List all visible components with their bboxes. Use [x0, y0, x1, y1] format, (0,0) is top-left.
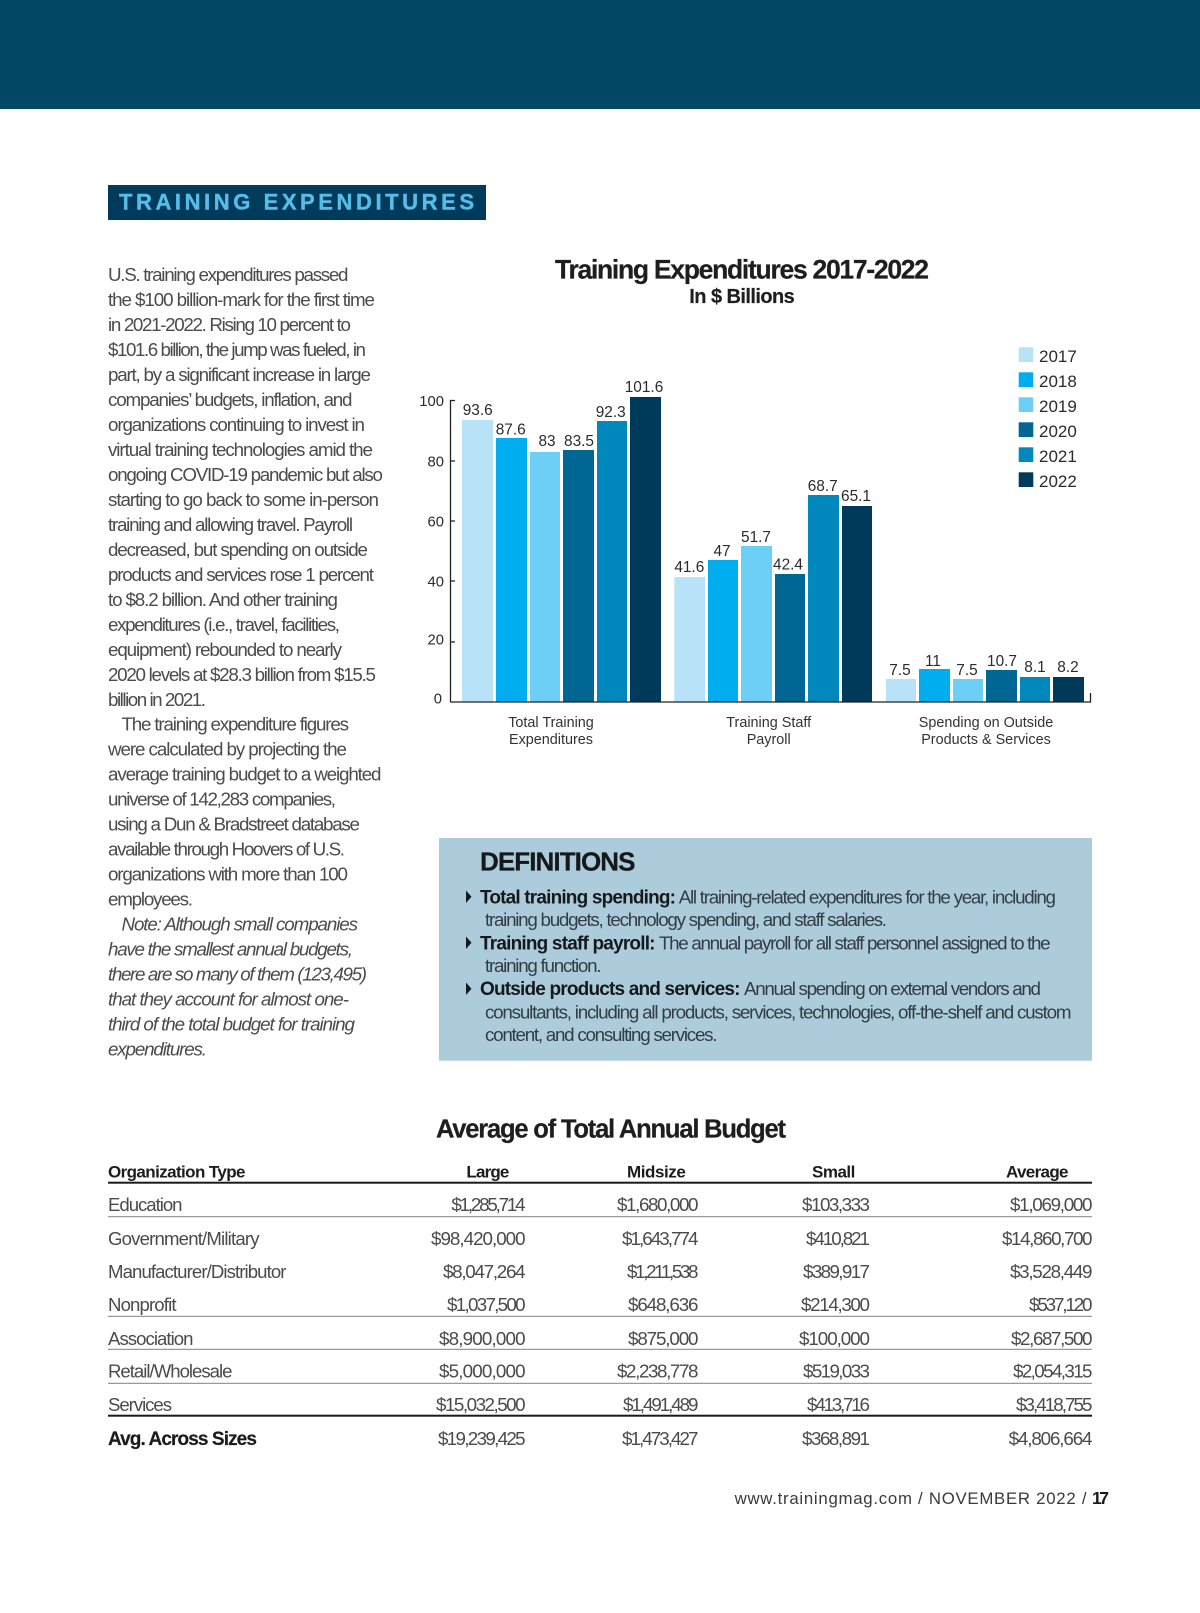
- body text column: third of the total budget for training: [108, 1014, 356, 1034]
- bar chart: training expenditures 2017-2022: [419, 379, 1090, 748]
- row: retail/wholesale: [108, 1361, 1092, 1384]
- body text column: 2020 levels at $28.3 billion from $15.5: [108, 664, 376, 685]
- category labels: Total Training: [508, 715, 594, 731]
- bars: training staff payroll: 41.6: [674, 559, 704, 576]
- body text column: average training budget to a weighted: [108, 764, 382, 784]
- chart legend: 2018: [1039, 372, 1077, 391]
- chart legend: 2022: [1039, 472, 1077, 491]
- row: manufacturer/distributor: $8,047,264: [443, 1261, 526, 1282]
- row: retail/wholesale: $2,054,315: [1013, 1361, 1092, 1382]
- bars: total training expenditures: 83: [538, 433, 556, 450]
- body text column: part, by a significant increase in large: [108, 364, 371, 385]
- row: manufacturer/distributor: $3,528,449: [1010, 1261, 1092, 1282]
- bars: training staff payroll: 47: [713, 543, 731, 560]
- body text column: expenditures (i.e., travel, facilities,: [108, 614, 340, 635]
- bars: spending on outside products and services: 7.5: [956, 662, 978, 679]
- row: association: $2,687,500: [1011, 1328, 1092, 1349]
- row: education: Education: [108, 1194, 182, 1215]
- table: average of total annual budget: [108, 1163, 1092, 1450]
- body text column: companies’ budgets, inflation, and: [108, 389, 352, 410]
- row: services: $413,716: [807, 1394, 870, 1415]
- definition: outside products and services: consultants, including all products, services, technologies, off-the-shelf and custom: [485, 1001, 1072, 1022]
- row: retail/wholesale: $519,033: [803, 1361, 870, 1382]
- x axis line: [450, 693, 1090, 702]
- row: average across sizes: $4,806,664: [1009, 1428, 1092, 1449]
- table header row: Midsize: [627, 1163, 686, 1182]
- definition: total training spending: Total training spending:: [480, 887, 676, 908]
- bars: spending on outside products and services: 7.5: [889, 662, 911, 679]
- body text column: organizations continuing to invest in: [108, 414, 365, 435]
- category labels: Expenditures: [509, 732, 593, 748]
- chart legend: [1019, 347, 1077, 491]
- header band: [0, 0, 1200, 109]
- row: education: $103,333: [802, 1194, 870, 1215]
- row: services: $15,032,500: [436, 1394, 526, 1415]
- row: services: $1,491,489: [623, 1394, 698, 1415]
- row: government/military: $14,860,700: [1002, 1228, 1092, 1249]
- bars: spending on outside products and services: 8.2: [1057, 659, 1079, 676]
- table header row: Average: [1006, 1163, 1068, 1182]
- row: manufacturer/distributor: [108, 1261, 1092, 1282]
- body text column: expenditures.: [108, 1038, 207, 1060]
- category labels: Spending on Outside: [919, 715, 1053, 731]
- row: nonprofit: $537,120: [1029, 1294, 1092, 1315]
- definition: outside products and services: Annual spending on external vendors and: [744, 978, 1041, 999]
- row: nonprofit: $214,300: [801, 1294, 870, 1315]
- row: government/military: $410,821: [806, 1228, 870, 1249]
- body text column: starting to go back to some in-person: [108, 489, 379, 510]
- row: manufacturer/distributor: $1,211,538: [627, 1261, 698, 1282]
- body text column: decreased, but spending on outside: [108, 539, 368, 560]
- definition: total training spending: All training-related expenditures for the year, including: [679, 886, 1056, 907]
- row: average across sizes: Avg. Across Sizes: [108, 1429, 257, 1450]
- row: manufacturer/distributor: $389,917: [803, 1261, 870, 1282]
- definition: training staff payroll: training function.: [485, 955, 602, 976]
- bars: training staff payroll: 42.4: [773, 557, 803, 574]
- body text column: ongoing COVID-19 pandemic but also: [108, 464, 383, 485]
- panel: definitions: [439, 838, 1092, 1061]
- chart legend: 2021: [1039, 447, 1077, 466]
- definition: training staff payroll: Training staff payroll:: [480, 933, 656, 954]
- body text column: training and allowing travel. Payroll: [108, 514, 353, 535]
- body text column: [107, 264, 383, 1060]
- y axis with ticks and labels: 40: [428, 575, 444, 591]
- footer: url, date and page number: www.trainingmag.com / NOVEMBER 2022 /: [734, 1489, 1087, 1508]
- row: services: [108, 1394, 1092, 1417]
- bars: spending on outside products and services: [886, 653, 1084, 702]
- row: retail/wholesale: Retail/Wholesale: [108, 1361, 232, 1382]
- body text column: to $8.2 billion. And other training: [108, 589, 338, 610]
- y axis with ticks and labels: [419, 394, 455, 708]
- row: nonprofit: $1,037,500: [447, 1294, 526, 1315]
- definition: total training spending: [466, 886, 1056, 930]
- bars: spending on outside products and services: 11: [925, 653, 941, 670]
- chart title: In $ Billions: [689, 286, 795, 308]
- body text column: have the smallest annual budgets,: [108, 938, 353, 960]
- bars: total training expenditures: 87.6: [496, 421, 526, 438]
- row: retail/wholesale: $5,000,000: [439, 1361, 526, 1382]
- category labels: Training Staff: [726, 715, 812, 731]
- row: services: $3,418,755: [1016, 1394, 1092, 1415]
- body text column: billion in 2021.: [108, 689, 206, 710]
- section banner: training expenditures: TRAINING EXPENDITURES: [119, 190, 474, 214]
- row: average across sizes: $1,473,427: [622, 1428, 698, 1449]
- row: government/military: $98,420,000: [431, 1228, 526, 1249]
- row: education: $1,069,000: [1010, 1194, 1092, 1215]
- table header row: Small: [812, 1163, 855, 1182]
- row: nonprofit: $648,636: [628, 1294, 698, 1315]
- bars: training staff payroll: 65.1: [841, 488, 871, 505]
- row: retail/wholesale: $2,238,778: [617, 1361, 698, 1382]
- body text column: that they account for almost one-: [108, 988, 349, 1010]
- row: association: $100,000: [799, 1328, 870, 1349]
- y axis with ticks and labels: 100: [419, 394, 444, 410]
- row: association: [108, 1328, 1092, 1350]
- definition: training staff payroll: [466, 932, 1051, 976]
- footer: url, date and page number: 17: [1092, 1488, 1109, 1508]
- body text column: products and services rose 1 percent: [108, 564, 375, 585]
- y axis with ticks and labels: 20: [428, 632, 444, 648]
- row: education: $1,680,000: [617, 1194, 698, 1215]
- section banner: training expenditures: [108, 185, 486, 220]
- definition: training staff payroll: The annual payroll for all staff personnel assigned to the: [659, 932, 1051, 953]
- body text column: available through Hoovers of U.S.: [108, 838, 345, 860]
- body text column: equipment) rebounded to nearly: [108, 639, 343, 660]
- chart legend: 2017: [1039, 347, 1077, 366]
- definitions heading: DEFINITIONS: [480, 847, 636, 877]
- definition: outside products and services: content, and consulting services.: [485, 1024, 718, 1045]
- bars: total training expenditures: 93.6: [463, 402, 493, 419]
- row: association: $8,900,000: [439, 1328, 526, 1349]
- y axis with ticks and labels: 60: [428, 515, 444, 531]
- chart title: [555, 254, 929, 308]
- definition: total training spending: training budgets, technology spending, and staff salaries.: [485, 909, 887, 930]
- y axis with ticks and labels: 80: [428, 455, 444, 471]
- row: nonprofit: Nonprofit: [108, 1294, 177, 1315]
- definition: outside products and services: [466, 978, 1072, 1045]
- category labels: Products & Services: [921, 732, 1051, 748]
- row: average across sizes: $368,891: [802, 1428, 870, 1449]
- body text column: universe of 142,283 companies,: [108, 788, 336, 810]
- body text column: there are so many of them (123,495): [108, 964, 367, 984]
- bars: training staff payroll: 51.7: [741, 529, 771, 546]
- row: association: Association: [108, 1328, 194, 1349]
- table header row: [108, 1163, 1092, 1184]
- body text column: using a Dun & Bradstreet database: [108, 814, 360, 834]
- bars: training staff payroll: 68.7: [808, 478, 838, 495]
- row: manufacturer/distributor: Manufacturer/Distributor: [108, 1261, 286, 1282]
- body text column: in 2021-2022. Rising 10 percent to: [108, 314, 351, 335]
- chart title: Training Expenditures 2017-2022: [555, 254, 929, 284]
- table header row: Organization Type: [108, 1163, 246, 1182]
- body text column: employees.: [108, 888, 193, 910]
- row: government/military: Government/Military: [108, 1228, 260, 1249]
- bars: total training expenditures: 92.3: [596, 404, 626, 421]
- body text column: were calculated by projecting the: [107, 738, 347, 760]
- bars: spending on outside products and services: 8.1: [1024, 659, 1046, 676]
- body text column: organizations with more than 100: [108, 864, 348, 884]
- bars: spending on outside products and services: 10.7: [987, 653, 1017, 670]
- chart legend: 2020: [1039, 422, 1077, 441]
- row: government/military: $1,643,774: [622, 1228, 698, 1249]
- body text column: U.S. training expenditures passed: [108, 264, 348, 285]
- definition: outside products and services: Outside products and services:: [480, 979, 740, 1000]
- row: services: Services: [108, 1394, 172, 1415]
- bars: training staff payroll: [674, 478, 872, 702]
- body text column: $101.6 billion, the jump was fueled, in: [108, 339, 366, 360]
- row: education: [108, 1194, 1092, 1217]
- body text column: the $100 billion-mark for the first time: [108, 289, 375, 310]
- bars: total training expenditures: 101.6: [625, 379, 663, 396]
- body text column: Note: Although small companies: [122, 914, 358, 934]
- table title: Average of Total Annual Budget: [436, 1115, 786, 1143]
- row: nonprofit: [108, 1294, 1092, 1317]
- body text column: virtual training technologies amid the: [108, 439, 373, 460]
- y axis with ticks and labels: 0: [434, 692, 442, 708]
- row: average across sizes: [108, 1428, 1092, 1450]
- table header row: Large: [466, 1163, 509, 1182]
- bars: total training expenditures: 83.5: [564, 433, 594, 450]
- row: education: $1,285,714: [451, 1194, 526, 1215]
- category labels: [508, 715, 1053, 748]
- bars: total training expenditures: [462, 379, 663, 702]
- row: government/military: [108, 1228, 1092, 1249]
- chart legend: 2019: [1039, 397, 1077, 416]
- body text column: The training expenditure figures: [122, 714, 349, 734]
- row: average across sizes: $19,239,425: [438, 1428, 526, 1449]
- row: association: $875,000: [628, 1328, 698, 1349]
- category labels: Payroll: [747, 732, 791, 748]
